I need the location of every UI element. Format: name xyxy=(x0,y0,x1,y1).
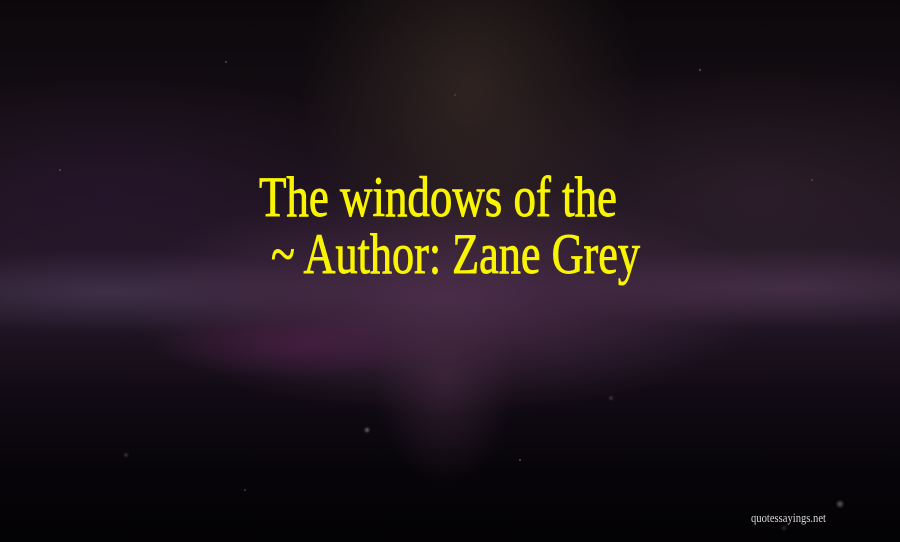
watermark: quotessayings.net xyxy=(751,510,826,525)
stars xyxy=(59,61,843,530)
quote text: The windows of the xyxy=(259,166,617,229)
author line: ~ Author: Zane Grey xyxy=(271,223,640,286)
